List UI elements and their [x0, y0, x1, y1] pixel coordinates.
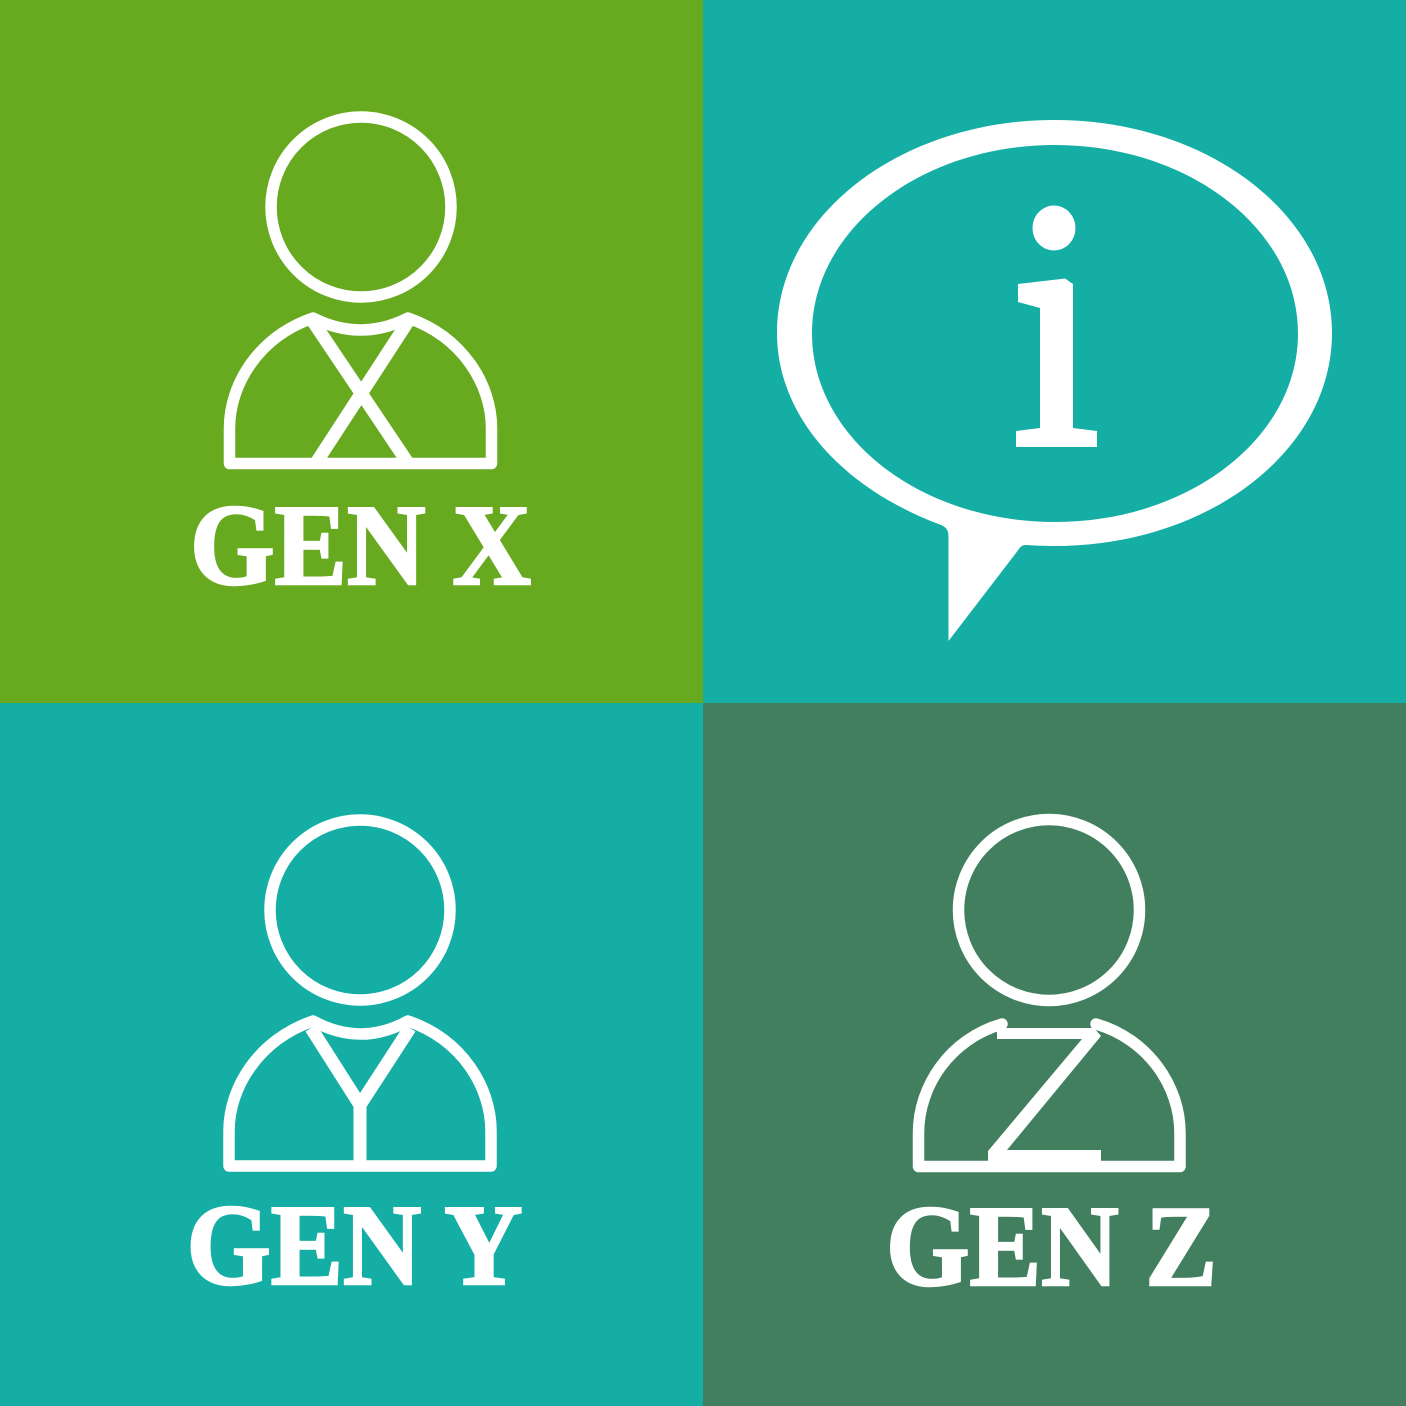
heading: Gen X: GEN X: [190, 482, 531, 610]
heading: Gen Y: GEN Y: [186, 1182, 522, 1310]
panel: Gen Y: [0, 703, 703, 1406]
heading: Gen Z: GEN Z: [886, 1183, 1217, 1311]
icon: Gen Z person: [918, 820, 1180, 1166]
panel: Gen Z: [703, 703, 1406, 1406]
icon: speech bubble: [777, 120, 1332, 641]
icon: Gen Y person: [229, 820, 491, 1166]
panel: Gen X: [0, 0, 703, 703]
icon: information letter i: [1016, 206, 1097, 447]
icon: Gen X person: [230, 117, 492, 464]
panel: information: [703, 0, 1406, 703]
